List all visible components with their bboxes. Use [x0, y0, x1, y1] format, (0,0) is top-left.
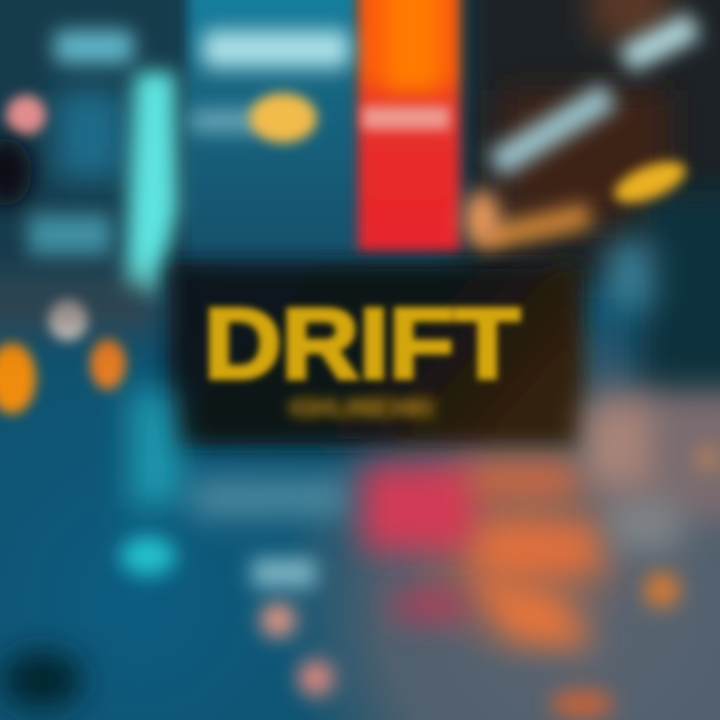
- orange streak: [480, 215, 590, 240]
- orange light left: [90, 338, 126, 390]
- diagonal pale streak upper: [625, 25, 695, 60]
- white light left: [48, 300, 88, 340]
- pale reflection lower: [252, 558, 316, 588]
- dark patch bottom left: [2, 652, 82, 708]
- heading: DRIFT: DRIFT: [204, 288, 520, 400]
- cyan neon column: [125, 72, 178, 298]
- amber lamp: [249, 93, 317, 143]
- dark blob left: [0, 138, 32, 206]
- pale reflection band: [190, 480, 350, 516]
- orange spot right: [644, 572, 680, 608]
- pink band on red column: [362, 106, 450, 130]
- red reflection: [362, 465, 478, 551]
- light strip left of lamp: [190, 110, 260, 132]
- pink spot bottom: [298, 660, 334, 696]
- orange reflection top: [470, 464, 578, 494]
- orange core in red column: [385, 0, 440, 90]
- pink patch right: [585, 405, 650, 485]
- pink spot lower: [260, 602, 296, 638]
- subtitle: GUIDE: [289, 395, 435, 422]
- red reflection lower: [388, 589, 472, 621]
- diagonal pale streak lower: [495, 95, 610, 165]
- brown haze left: [0, 275, 160, 335]
- orange reflection middle: [475, 525, 600, 573]
- yellow lozenge: [609, 153, 691, 211]
- orange spot bottom: [550, 689, 614, 719]
- panel: red orange column: [358, 0, 460, 252]
- top centre light sign: [202, 30, 350, 68]
- orange reflection lower: [465, 575, 595, 650]
- panel: top centre blue column: [188, 0, 356, 265]
- blue glow right: [608, 240, 652, 310]
- orange spot at streak base: [464, 190, 500, 246]
- cyan reflection: [130, 390, 185, 510]
- pale sign left: [28, 214, 112, 256]
- orange light far left: [0, 342, 36, 414]
- panel: dark drift sign: [168, 262, 584, 446]
- pink glow top left: [6, 95, 46, 135]
- grey patch lower right: [610, 500, 680, 550]
- orange spot far right: [696, 446, 720, 470]
- cyan spot: [120, 536, 176, 576]
- top left light sign: [54, 30, 134, 64]
